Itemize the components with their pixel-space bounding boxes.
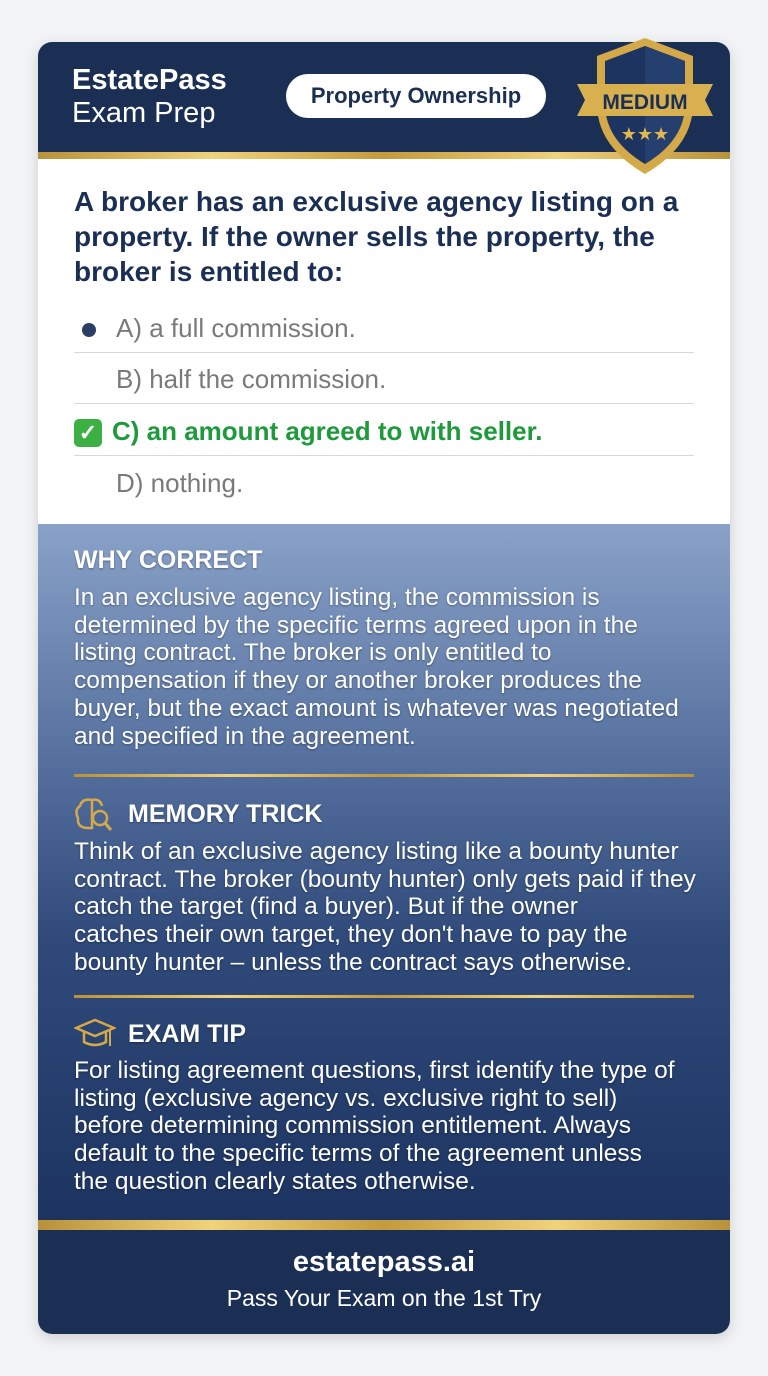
options (74, 313, 694, 498)
memory trick heading: MEMORY TRICK (128, 800, 322, 828)
exam tip text: before determining commission entitlement. Always (74, 1112, 631, 1139)
header (38, 42, 730, 152)
option B: B) half the commission. (116, 364, 386, 394)
category pill: Property Ownership (311, 83, 521, 108)
logo text: EstatePass (72, 64, 227, 96)
memory trick text: catches their own target, they don't have to pay the (74, 921, 628, 948)
exam tip text: default to the specific terms of the agreement unless (74, 1140, 642, 1167)
why correct text: compensation if they or another broker produces the (74, 667, 642, 694)
footer (38, 1230, 730, 1334)
badge: medium shield: MEDIUM (602, 91, 688, 114)
why correct text: In an exclusive agency listing, the commission is (74, 584, 600, 611)
why correct heading: WHY CORRECT (74, 546, 262, 574)
option D: D) nothing. (116, 468, 243, 498)
exam tip text (74, 1057, 675, 1196)
logo text (72, 64, 227, 129)
badge: medium shield: ★★★ (621, 124, 669, 144)
question: A broker has an exclusive agency listing on a (74, 186, 678, 217)
footer: estatepass.ai (293, 1246, 475, 1278)
gold bar bottom (38, 1220, 730, 1230)
option A: A) a full commission. (116, 313, 356, 343)
why correct text: determined by the specific terms agreed upon in the (74, 612, 638, 639)
why correct text (74, 584, 679, 751)
gold bar top (38, 152, 730, 159)
icon: grad cap (74, 1018, 116, 1046)
why correct text: listing contract. The broker is only entitled to (74, 639, 552, 666)
why correct text: buyer, but the exact amount is whatever was negotiated (74, 695, 679, 722)
badge: medium shield (577, 38, 713, 174)
category pill (286, 74, 546, 118)
option C correct: C) an amount agreed to with seller. (112, 416, 543, 446)
icon: brain (75, 798, 112, 831)
exam tip text: the question clearly states otherwise. (74, 1168, 476, 1195)
explanation panel (38, 524, 730, 1220)
question (74, 186, 678, 287)
footer: Pass Your Exam on the 1st Try (227, 1285, 541, 1311)
memory trick text: Think of an exclusive agency listing like a bounty hunter (74, 838, 679, 865)
exam tip text: listing (exclusive agency vs. exclusive right to sell) (74, 1085, 617, 1112)
exam tip heading: EXAM TIP (128, 1020, 246, 1048)
logo text: Exam Prep (72, 97, 215, 129)
why correct text: and specified in the agreement. (74, 723, 416, 750)
option C correct: ✓ (79, 420, 97, 445)
question: broker is entitled to: (74, 256, 343, 287)
memory trick text: contract. The broker (bounty hunter) only gets paid if they (74, 866, 696, 893)
question: property. If the owner sells the property, the (74, 221, 655, 252)
memory trick text: bounty hunter – unless the contract says otherwise. (74, 949, 632, 976)
memory trick heading (75, 798, 322, 831)
exam tip heading (74, 1018, 246, 1048)
memory trick text (74, 838, 696, 977)
memory trick text: catch the target (find a buyer). But if the owner (74, 893, 578, 920)
exam tip text: For listing agreement questions, first identify the type of (74, 1057, 675, 1084)
